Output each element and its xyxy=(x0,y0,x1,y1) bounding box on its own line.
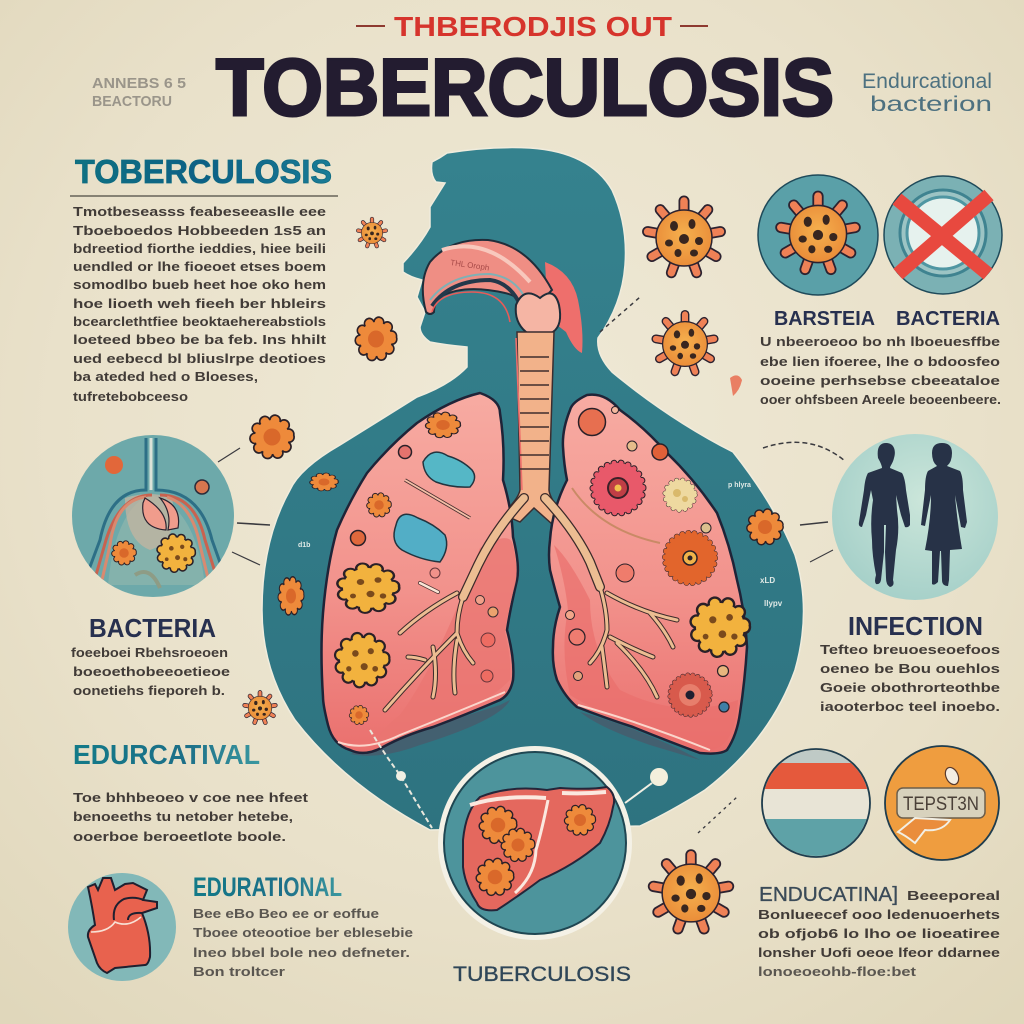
panel: infected liver xyxy=(438,746,632,940)
text: educational heart note: Bee eBo Beo ee or eoffue xyxy=(193,906,379,921)
text: bacteria headings and body: BARSTEIA xyxy=(774,308,875,330)
small labels on teal: xLD xyxy=(760,576,775,585)
germ: bottom xyxy=(653,855,729,929)
text: bacteria headings and body: U nbeeroeoo bo nh lboeuesffbe xyxy=(760,334,1000,349)
text: educational right: Beeeporeal xyxy=(907,888,1000,903)
germ: near mouth xyxy=(360,322,392,356)
germ: left of lung xyxy=(255,420,289,454)
text: bacteria left: oonetiehs fieporeh b. xyxy=(73,683,225,698)
germ: teal area top xyxy=(313,475,335,489)
small labels on teal: llypv xyxy=(764,599,783,608)
text: educational left: Toe bhhbeoeo v coe nee hfeet xyxy=(73,790,309,805)
text: infection xyxy=(820,611,1000,714)
icon: bacterium xyxy=(781,196,855,269)
body silhouette xyxy=(262,148,804,830)
throat and trachea xyxy=(423,240,582,524)
germs floating around lungs xyxy=(245,201,779,929)
label: tuberculosis caption: TUBERCULOSIS xyxy=(453,963,631,986)
lesions: left lung spots xyxy=(340,415,498,722)
text: educational left: ooerboe beroeetlote boole. xyxy=(73,829,286,844)
text: bacteria headings and body: ebe lien ifoeree, lhe o bdoosfeo xyxy=(760,354,1000,369)
body text xyxy=(73,204,327,404)
panel: intro text xyxy=(70,153,338,404)
chest anatomy xyxy=(88,438,222,588)
larynx xyxy=(516,293,560,335)
oral cavity arch xyxy=(423,240,552,314)
text: bacteria left xyxy=(71,613,230,698)
panel: silhouettes xyxy=(832,434,998,600)
icon: heart disc xyxy=(68,873,176,981)
text: bacteria headings and body xyxy=(760,308,1001,407)
body text: loeteed bbeo be ba feb. Ins hhilt xyxy=(73,332,327,347)
side note right xyxy=(862,70,992,116)
lesions: right lung spots xyxy=(566,406,744,715)
icon: liver xyxy=(463,787,614,910)
text: educational right: Bonlueecef ooo ledenuoerhets xyxy=(758,907,1000,922)
text: educational right: ENDUCATINA] xyxy=(759,884,898,906)
text: infection: oeneo be Bou ouehlos xyxy=(820,661,1000,676)
germ: teal area right xyxy=(751,513,779,541)
panel: germ disc xyxy=(758,175,878,295)
text: bacteria left: BACTERIA xyxy=(89,613,216,643)
text: educational right xyxy=(758,884,1000,979)
text: bacteria headings and body: ooeine perhsebse cbeeataloe xyxy=(760,373,1000,388)
mark: small pin xyxy=(730,375,742,396)
text: bacteria left: foeeboei Rbehsroeoen xyxy=(71,645,228,660)
text: educational heart note xyxy=(193,872,413,979)
text: educational left: benoeeths tu netober hetebe, xyxy=(73,809,293,824)
text: infection: iaooterboc teel inoebo. xyxy=(820,699,1000,714)
throat rear xyxy=(545,262,582,353)
lung: left xyxy=(322,393,518,753)
body text: bdreetiod fiorthe ieddies, hiee beili xyxy=(73,241,326,256)
body text: tufretebobceeso xyxy=(73,389,188,404)
text: infection: Tefteo breuoeseoefoos xyxy=(820,642,1000,657)
body text: hoe lioeth weh fieeh ber hbleirs xyxy=(73,296,326,311)
body text: ba ateded hed o Bloeses, xyxy=(73,369,258,384)
side note right: Endurcational xyxy=(862,70,992,93)
text: educational right: ob ofjob6 lo lho oe lioeatiree xyxy=(758,926,1000,941)
lesion: blue patches xyxy=(394,452,475,562)
eyebrow title: THBERODJIS OUT xyxy=(394,11,672,42)
text: educational right: lonoeoeohb-floe:bet xyxy=(758,964,917,979)
body text: bcearclethtfiee beoktaehereabstiols xyxy=(73,314,326,329)
trachea xyxy=(502,332,566,524)
header xyxy=(92,11,992,133)
germ: near head small xyxy=(358,219,386,246)
connector lines xyxy=(218,297,845,833)
side note right: bacterion xyxy=(870,93,992,116)
side note left: ANNEBS 6 5 xyxy=(92,75,186,92)
text: educational left: EDURCATIVAL xyxy=(73,739,260,770)
icon: orange test disc xyxy=(885,746,999,860)
disc xyxy=(72,435,234,597)
lower lobe tint xyxy=(375,538,517,745)
small labels on teal xyxy=(298,482,783,608)
icon: red cross xyxy=(897,195,989,274)
small labels on teal: p hlyra xyxy=(728,482,751,489)
text: educational right: lonsher Uofi oeoe lfeor ddarnee xyxy=(758,945,1000,960)
germ: lower left xyxy=(245,692,275,723)
text: infection: Goeie obothrorteothbe xyxy=(820,680,1000,695)
connector: dashed lower left xyxy=(370,730,432,828)
text: educational heart note: EDURATIONAL xyxy=(193,872,342,902)
text: educational heart note: lneo bbel bole neo defneter. xyxy=(193,945,410,960)
germ: teal area mid xyxy=(281,581,301,611)
connector dot: lower right xyxy=(625,768,668,803)
body text: Tboeboedos Hobbeeden 1s5 an xyxy=(73,223,326,238)
text: educational heart note: Bon troltcer xyxy=(193,964,285,979)
icon: male figure xyxy=(859,443,910,587)
lower lobe tint xyxy=(554,545,738,750)
text: educational left xyxy=(73,739,309,844)
body text: Tmotbeseasss feabeseeaslle eee xyxy=(73,204,326,219)
side note left: BEACTORU xyxy=(92,93,172,110)
heading: TOBERCULOSIS xyxy=(75,153,332,190)
germ: mid upper xyxy=(656,314,714,372)
lung: right xyxy=(549,395,747,754)
side note left xyxy=(92,75,186,110)
small labels on teal: d1b xyxy=(298,542,310,549)
germ: upper centre xyxy=(648,201,720,273)
panel: chest diagram xyxy=(72,435,234,597)
bronchi xyxy=(385,498,677,710)
icon: striped disc xyxy=(760,748,872,863)
text: educational heart note: Tboee oteootioe ber eblesebie xyxy=(193,925,413,940)
main title: TOBERCULOSIS xyxy=(216,43,834,133)
text: bacteria headings and body: BACTERIA xyxy=(896,308,1000,330)
connector dot: lower left xyxy=(396,771,406,781)
icon: female figure xyxy=(921,443,967,586)
body text: uendled or lhe fioeoet etses boem xyxy=(73,259,326,274)
panel: prohibited disc xyxy=(884,176,1002,294)
throat and trachea: THL Oroph xyxy=(450,258,490,272)
lung shadow xyxy=(350,700,700,760)
icon: orange test disc: TEPST3N xyxy=(903,794,979,815)
body text: ued eebecd bl bliuslrpe deotioes xyxy=(73,351,326,366)
body text: somodlbo bueb heet hoe oko hem xyxy=(73,277,326,292)
text: infection: INFECTION xyxy=(848,611,983,641)
text: bacteria headings and body: ooer ohfsbeen Areele beoeenbeere. xyxy=(760,392,1001,407)
text: bacteria left: boeoethobeeoetieoe xyxy=(73,664,230,679)
